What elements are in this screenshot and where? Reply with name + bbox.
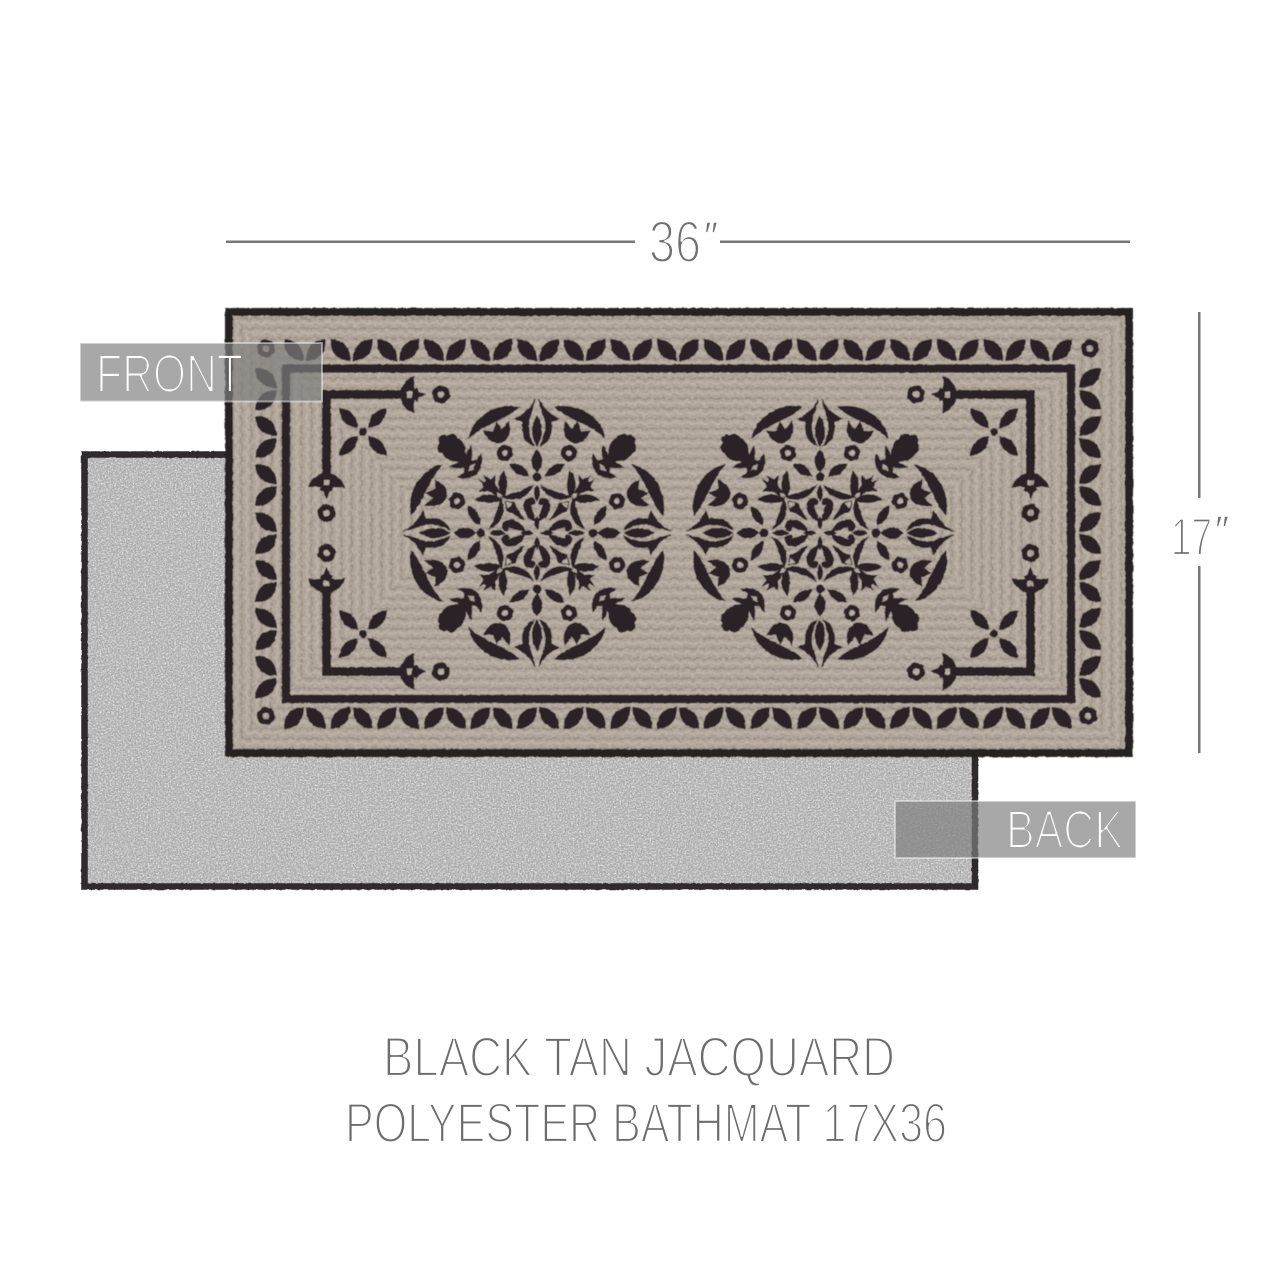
leaf border: top row xyxy=(258,339,1098,361)
width dimension: 36 inches: 36 xyxy=(649,210,701,275)
right medallion xyxy=(686,399,954,667)
leaf border: left column xyxy=(255,368,277,698)
braided tan ground xyxy=(229,312,1129,753)
leaf border: right column xyxy=(1079,368,1101,698)
left medallion xyxy=(403,399,671,667)
panel: front of mat xyxy=(229,312,1129,753)
panel: back of mat xyxy=(84,454,975,886)
caption line 1: BLACK TAN JACQUARD xyxy=(383,1025,895,1088)
caption line 2: POLYESTER BATHMAT 17X36 xyxy=(345,1091,947,1154)
width dimension: 36 inches: ″ xyxy=(704,215,718,259)
corner ornaments xyxy=(308,376,1049,690)
height dimension: 17 inches xyxy=(1171,312,1229,753)
leaf border: bottom row xyxy=(258,707,1096,729)
label: BACK: BACK xyxy=(1006,800,1123,860)
height dimension: 17 inches: 17 xyxy=(1171,508,1212,567)
inner border frame xyxy=(286,368,1071,699)
label: BACK xyxy=(895,800,1136,860)
height dimension: 17 inches: ″ xyxy=(1215,509,1229,553)
label: FRONT: FRONT xyxy=(96,344,243,404)
black binding edge xyxy=(229,312,1129,753)
width dimension: 36 inches xyxy=(226,210,1130,275)
